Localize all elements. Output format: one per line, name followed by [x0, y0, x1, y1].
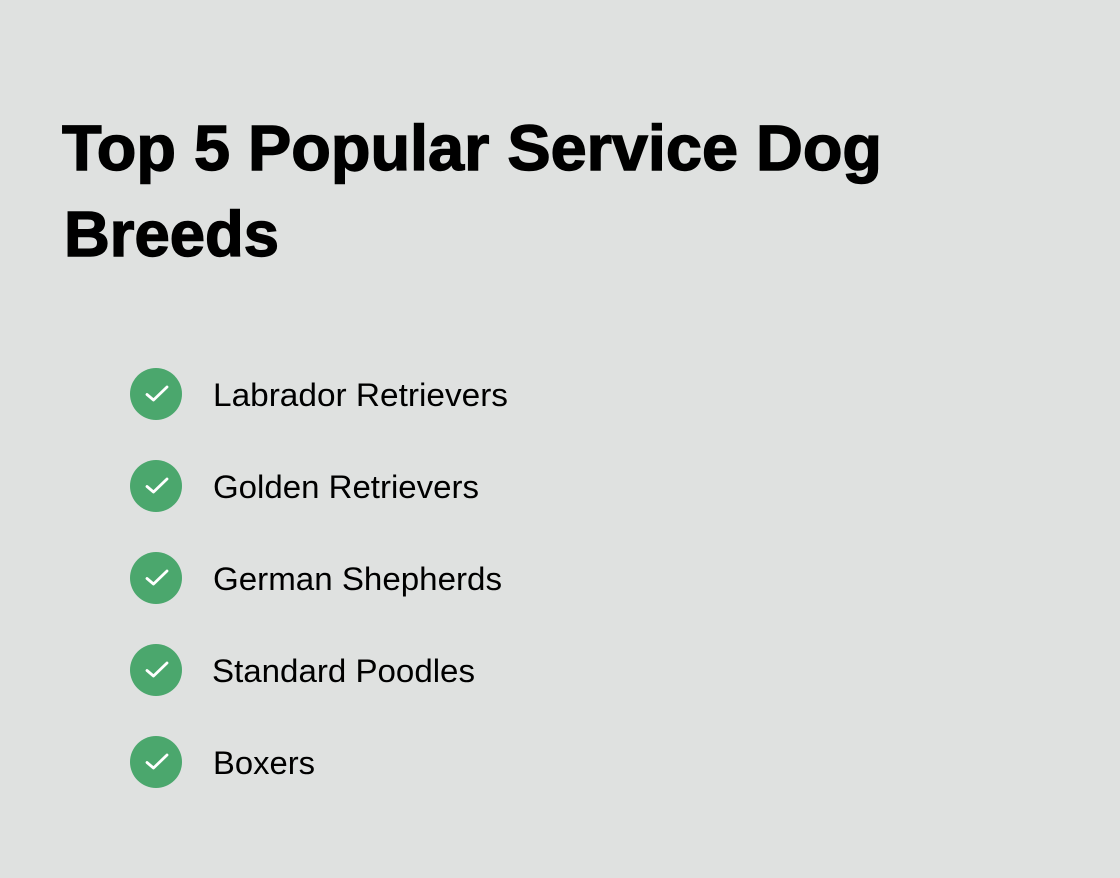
checklist	[130, 368, 508, 788]
item: Standard Poodles	[130, 644, 475, 696]
item: Boxers	[130, 736, 315, 788]
item: Boxers: Boxers	[213, 745, 315, 781]
item: German Shepherds: German Shepherds	[213, 561, 502, 597]
title	[62, 112, 882, 270]
item: Standard Poodles: Standard Poodles	[212, 653, 475, 689]
item: Golden Retrievers	[130, 460, 479, 512]
title: Breeds	[64, 198, 279, 270]
item: German Shepherds	[130, 552, 502, 604]
item: Labrador Retrievers: Labrador Retrievers	[213, 377, 508, 413]
title: Top 5 Popular Service Dog	[62, 112, 882, 184]
item: Golden Retrievers: Golden Retrievers	[213, 469, 479, 505]
item: Labrador Retrievers	[130, 368, 508, 420]
